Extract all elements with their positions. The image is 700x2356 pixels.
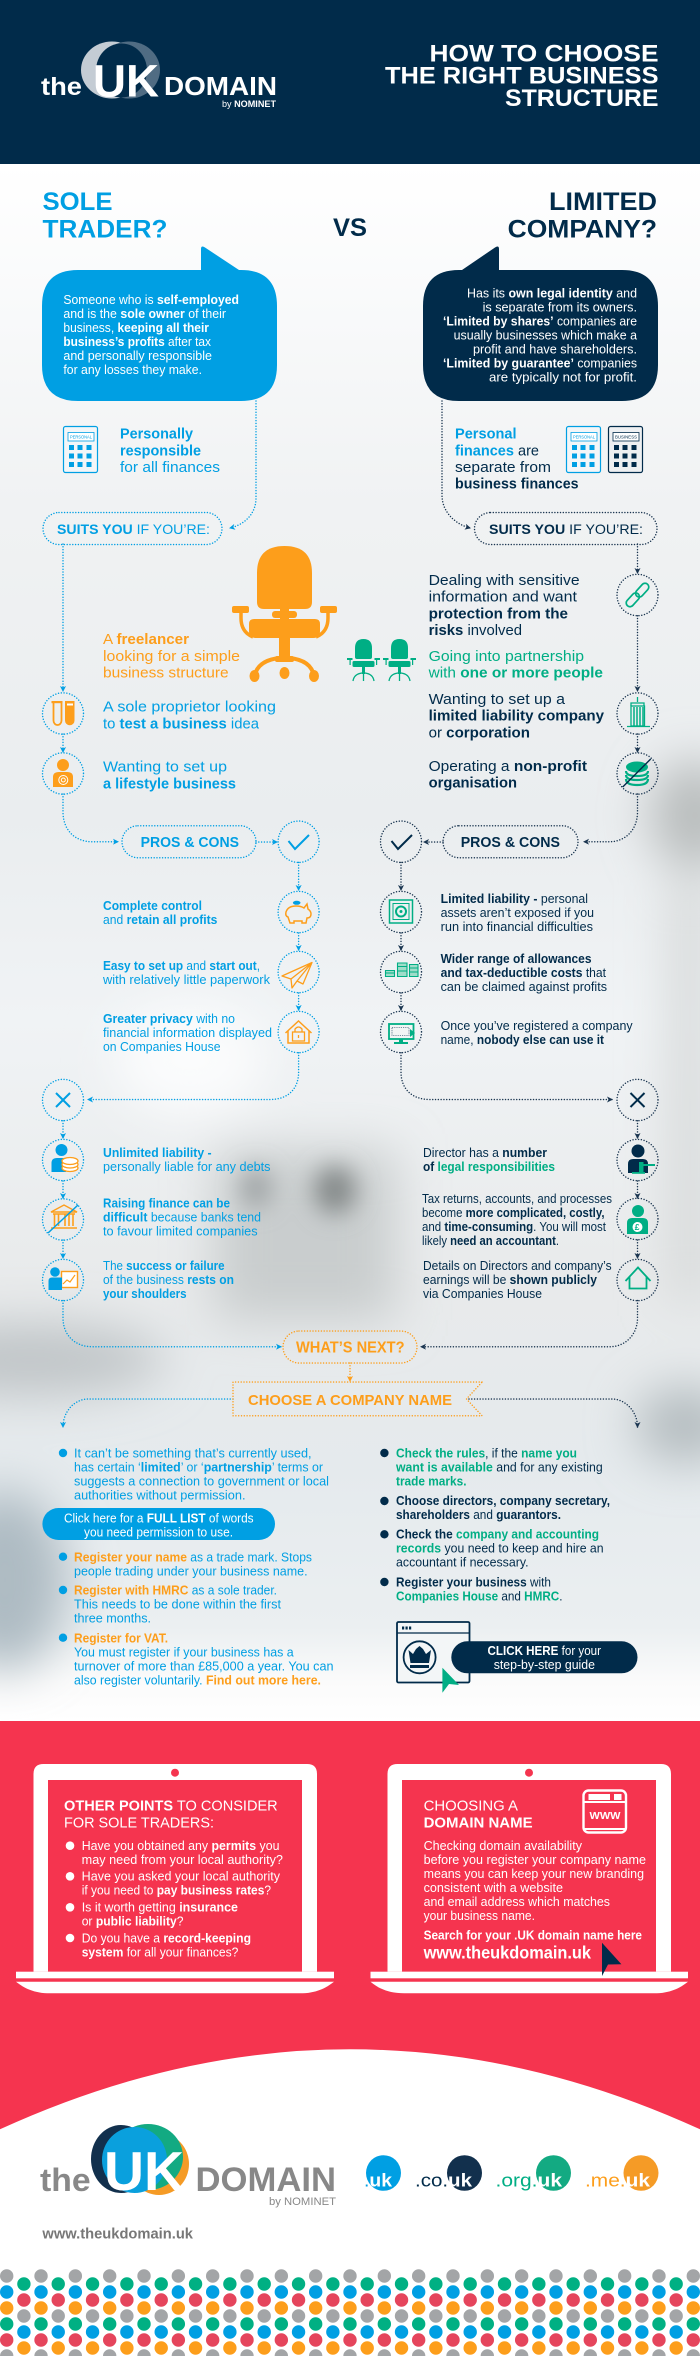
decorative dot pattern xyxy=(7,2276,700,2356)
speech bubble: sole trader: business’s profits after tax xyxy=(63,335,212,349)
list: left registration steps: Register for VAT. xyxy=(74,1631,168,1645)
speech bubble: limited company: ‘Limited by guarantee’ companies xyxy=(443,356,637,370)
icon: monitor xyxy=(380,1011,422,1053)
banner: choose a company name: CHOOSE A COMPANY NAME xyxy=(248,1392,452,1409)
text: success or failure: your shoulders xyxy=(103,1287,187,1301)
logo: the UK domain: UK xyxy=(93,56,160,106)
text: non-profit: organisation xyxy=(429,776,517,792)
logo: the UK domain footer xyxy=(40,2124,336,2208)
text: limited liability company xyxy=(429,692,604,741)
icon: navy cross xyxy=(617,1079,658,1121)
text: success or failure: of the business rests on xyxy=(103,1273,234,1287)
text: non-profit: Operating a non-profit xyxy=(429,759,587,775)
speech bubble: sole trader: and personally responsible xyxy=(63,349,212,363)
icon: house with padlock xyxy=(278,1011,319,1053)
icon: coins crossed out xyxy=(617,753,658,794)
icon: personal finances card: PERSONAL xyxy=(70,434,93,439)
pill: what's next: WHAT’S NEXT? xyxy=(296,1340,404,1357)
list: left registration steps: people trading under your business name. xyxy=(74,1564,308,1578)
text: sensitive information: Dealing with sensitive xyxy=(429,573,580,589)
heading: limited company: LIMITED xyxy=(549,188,657,216)
logo: the UK domain footer: by NOMINET xyxy=(269,2196,336,2208)
panel: laptop choosing a domain name: CHOOSING A xyxy=(424,1799,518,1815)
text: test a business xyxy=(103,700,276,733)
icon: person with target xyxy=(42,753,84,794)
icon: person with coins xyxy=(42,1139,84,1181)
text: limited liability: Limited liability - personal xyxy=(441,892,588,906)
panel: laptop choosing a domain name: Search for your .UK domain name here xyxy=(424,1928,642,1942)
icon: personal card, right: PERSONAL xyxy=(573,434,596,439)
text: partnership: Going into partnership xyxy=(429,649,584,665)
icon: small green chair two xyxy=(383,639,416,681)
list: right company steps: records you need to keep and hire an xyxy=(396,1542,604,1556)
icon: business card, right xyxy=(608,426,642,472)
text: lifestyle business: Wanting to set up xyxy=(103,760,227,776)
heading: sole trader xyxy=(42,188,168,243)
text: raising finance: difficult because banks tend xyxy=(103,1211,261,1225)
title xyxy=(385,41,658,112)
pill: pros and cons, limited company xyxy=(443,826,578,858)
text: unlimited liability: personally liable for any debts xyxy=(103,1160,270,1174)
text: tax returns: Tax returns, accounts, and processes xyxy=(422,1192,612,1206)
list: left registration steps: This needs to be done within the first xyxy=(74,1598,282,1612)
text: limited liability company: Wanting to set up a xyxy=(429,692,566,708)
text: lifestyle business xyxy=(103,760,236,792)
badge: .me.uk xyxy=(585,2155,658,2191)
title: STRUCTURE xyxy=(505,85,658,112)
pill: suits you, sole trader: SUITS YOU IF YOU’RE: xyxy=(57,521,210,537)
icon: director with gavel xyxy=(617,1139,658,1181)
text: greater privacy xyxy=(103,1012,272,1054)
blurred office background xyxy=(0,344,700,1700)
text: greater privacy: on Companies House xyxy=(103,1040,221,1054)
logo: the UK domain xyxy=(41,42,277,110)
list: left registration steps xyxy=(59,1550,334,1687)
list: left registration steps: Register with HMRC as a sole trader. xyxy=(74,1584,277,1598)
list: left registration steps: also register voluntarily. Find out more here. xyxy=(74,1673,321,1687)
connectors: limited company flow xyxy=(401,401,638,1427)
button: click here xyxy=(451,1641,638,1673)
heading: limited company xyxy=(508,188,657,243)
text: allowances: can be claimed against profits xyxy=(441,980,607,994)
pill: pros and cons, sole trader xyxy=(122,826,256,858)
list: right company steps xyxy=(380,1446,610,1603)
text: easy to set up: with relatively little paperwork xyxy=(102,973,271,987)
badge: .uk xyxy=(364,2155,401,2191)
badge: .org.uk xyxy=(496,2155,571,2191)
text: legal responsibilities: Director has a number xyxy=(423,1146,547,1160)
text: tax returns: and time-consuming. You will most xyxy=(422,1220,606,1234)
text: tax returns: become more complicated, costly, xyxy=(422,1206,604,1220)
icon: building xyxy=(617,693,658,734)
text: test a business: to test a business idea xyxy=(103,717,260,733)
button: click here: step-by-step guide xyxy=(494,1658,595,1672)
panel: laptop other points: if you need to pay business rates? xyxy=(82,1884,271,1898)
list: left naming rules: authorities without permission. xyxy=(74,1488,246,1502)
logo: the UK domain footer: DOMAIN xyxy=(196,2161,336,2199)
panel: laptop other points: or public liability? xyxy=(82,1915,184,1929)
text: easy to set up xyxy=(102,959,271,987)
heading: sole trader: SOLE xyxy=(42,188,112,216)
badge: .me.uk: .me. uk xyxy=(585,2171,651,2191)
list: left registration steps: three months. xyxy=(74,1612,151,1626)
panel: laptop choosing a domain name: before you register your company name xyxy=(424,1853,646,1867)
icon: www browser window: WWW xyxy=(590,1810,621,1822)
list: right company steps: accountant if necessary. xyxy=(396,1556,529,1570)
icon: personal card, right xyxy=(566,426,600,472)
list: left naming rules: has certain ‘limited’ or ‘partnership’ terms or xyxy=(74,1460,323,1474)
pill: pros and cons, sole trader: PROS & CONS xyxy=(141,835,239,851)
icon: safe xyxy=(380,891,422,933)
text: allowances xyxy=(441,952,607,994)
panel: laptop choosing a domain name: www.theukdomain.uk xyxy=(423,1942,591,1962)
icon: presenter with chart xyxy=(42,1259,84,1301)
list: right company steps: Choose directors, company secretary, xyxy=(396,1494,610,1508)
text: unlimited liability xyxy=(103,1146,270,1174)
pill: suits you, limited company: SUITS YOU IF YOU’RE: xyxy=(489,521,643,537)
icon: blue tick xyxy=(278,821,319,862)
pill: suits you, limited company xyxy=(474,512,657,544)
text: personally responsible: responsible xyxy=(120,443,201,459)
text: limited liability: run into financial difficulties xyxy=(441,920,593,934)
footer url: www.theukdomain.uk xyxy=(41,2226,194,2242)
button: full list: Click here for a FULL LIST of words xyxy=(64,1511,254,1525)
panel: laptop other points: Have you asked your local authority xyxy=(82,1870,281,1884)
button: click here: CLICK HERE for your xyxy=(488,1644,601,1658)
list: left registration steps: Register your name as a trade mark. Stops xyxy=(74,1550,312,1564)
list: right company steps: shareholders and guarantors. xyxy=(396,1508,561,1522)
button: full list xyxy=(42,1508,275,1540)
pill: suits you, sole trader xyxy=(43,512,222,544)
icon: business card, right: BUSINESS xyxy=(615,434,637,439)
text: details public: via Companies House xyxy=(423,1287,542,1301)
text: personally responsible xyxy=(120,426,220,476)
icon: www browser window xyxy=(584,1790,626,1832)
text: test a business: A sole proprietor looking xyxy=(103,700,276,716)
panel: laptop choosing a domain name: and email address which matches xyxy=(424,1895,610,1909)
text: limited liability company: limited liability company xyxy=(429,709,604,725)
logo: the UK domain footer: UK xyxy=(104,2140,184,2202)
text: personal finances separate: business finances xyxy=(455,476,579,492)
text: raising finance: to favour limited companies xyxy=(103,1225,258,1239)
panel: laptop choosing a domain name: means you can keep your new branding xyxy=(424,1867,644,1881)
list: left naming rules: suggests a connection to government or local xyxy=(74,1474,329,1488)
icon: person with pound sign: £ xyxy=(635,1222,640,1232)
speech bubble: sole trader xyxy=(42,247,277,401)
text: freelancer xyxy=(103,632,240,682)
heading: vs: VS xyxy=(333,214,367,242)
list: right company steps: trade marks. xyxy=(396,1474,466,1488)
icon: browser with crown xyxy=(397,1622,470,1682)
text: freelancer: looking for a simple xyxy=(103,649,240,665)
badge: .org.uk: .org. uk xyxy=(496,2171,563,2191)
speech bubble: limited company: is separate from its owners. xyxy=(483,300,637,314)
text: success or failure: The success or failure xyxy=(103,1259,225,1273)
icon: navy cursor xyxy=(602,1943,621,1976)
icon: bank crossed out xyxy=(42,1199,84,1240)
list: left registration steps: You must register if your business has a xyxy=(74,1645,294,1659)
logo: the UK domain: by NOMINET xyxy=(222,99,276,110)
icon: piggy bank xyxy=(278,891,319,933)
text: partnership xyxy=(428,649,603,682)
text: personal finances separate: finances are xyxy=(455,443,539,459)
logo: the UK domain footer: the xyxy=(40,2162,91,2198)
badge: .co.uk xyxy=(415,2155,482,2191)
logo: the UK domain: the xyxy=(41,73,82,101)
button: full list: you need permission to use. xyxy=(84,1525,233,1539)
logo: the UK domain: DOMAIN xyxy=(164,71,277,101)
connectors: sole trader flow xyxy=(63,401,299,1427)
speech bubble: sole trader: Someone who is self-employed xyxy=(63,293,239,307)
panel: laptop choosing a domain name: your business name. xyxy=(424,1909,535,1923)
title: THE RIGHT BUSINESS xyxy=(385,63,658,90)
icon: personal finances card xyxy=(64,426,98,472)
text: freelancer: A freelancer xyxy=(103,632,189,648)
text: complete control: Complete control xyxy=(103,899,202,913)
text: company name protected: Once you’ve registered a company xyxy=(441,1019,633,1033)
panel: laptop other points: OTHER POINTS TO CONSIDER xyxy=(64,1799,278,1815)
icon: test tubes xyxy=(42,693,84,734)
title: HOW TO CHOOSE xyxy=(430,41,658,68)
panel: laptop other points: FOR SOLE TRADERS: xyxy=(64,1815,214,1831)
pill: what's next xyxy=(283,1331,417,1363)
icon: small green chair one xyxy=(347,639,380,681)
speech bubble: limited company: usually businesses which make a xyxy=(454,328,637,342)
banner: choose a company name xyxy=(233,1382,482,1416)
list: left naming rules: It can’t be something that’s currently used, xyxy=(74,1446,312,1460)
text: success or failure xyxy=(103,1259,234,1301)
panel: laptop choosing a domain name: Checking domain availability xyxy=(424,1839,583,1853)
panel: laptop choosing a domain name: DOMAIN NAME xyxy=(424,1815,533,1831)
icon: stacks of money xyxy=(380,951,422,993)
text: greater privacy: Greater privacy with no xyxy=(103,1012,235,1026)
panel: laptop choosing a domain name xyxy=(370,1764,688,1993)
text: allowances: and tax-deductible costs that xyxy=(441,966,607,980)
text: personal finances separate xyxy=(455,426,579,492)
speech bubble: sole trader: and is the sole owner of their xyxy=(63,307,226,321)
list: right company steps: Check the company and accounting xyxy=(396,1528,599,1542)
text: sensitive information: risks involved xyxy=(429,623,522,639)
text: tax returns: likely need an accountant. xyxy=(422,1234,559,1248)
text: personally responsible: for all finances xyxy=(120,460,220,476)
speech bubble: limited company xyxy=(423,247,658,401)
icon: chain link xyxy=(617,574,658,616)
list: right company steps: want is available and for any existing xyxy=(395,1460,603,1474)
list: left naming rules xyxy=(59,1446,329,1502)
text: greater privacy: financial information displayed xyxy=(103,1026,272,1040)
text: sensitive information xyxy=(429,573,580,639)
badge: .co.uk: .co.uk xyxy=(415,2171,473,2191)
text: company name protected: name, nobody else can use it xyxy=(441,1033,605,1047)
icon: blue cross xyxy=(42,1079,84,1121)
icon: green cursor xyxy=(442,1668,459,1693)
header band xyxy=(0,0,700,164)
speech bubble: limited company: ‘Limited by shares’ companies are xyxy=(443,314,637,328)
text: lifestyle business: a lifestyle business xyxy=(103,776,236,792)
text: complete control: and retain all profits xyxy=(103,913,217,927)
text: details public: earnings will be shown publicly xyxy=(423,1273,597,1287)
speech bubble: sole trader: business, keeping all their xyxy=(63,321,209,335)
text: legal responsibilities xyxy=(423,1146,555,1174)
speech bubble: limited company: Has its own legal identity and xyxy=(467,286,637,300)
panel: laptop choosing a domain name: consistent with a website xyxy=(424,1881,563,1895)
icon: person with pound sign xyxy=(617,1198,658,1240)
text: company name protected xyxy=(441,1019,633,1047)
text: limited liability: assets aren’t exposed if you xyxy=(441,906,594,920)
text: partnership: with one or more people xyxy=(428,666,603,682)
list: right company steps: Companies House and HMRC. xyxy=(396,1589,562,1603)
heading: sole trader: TRADER? xyxy=(42,215,168,243)
text: personal finances separate: Personal xyxy=(455,426,516,442)
text: sensitive information: protection from the xyxy=(429,606,568,622)
red section with curved bottom xyxy=(0,1721,700,2129)
speech bubble: limited company: profit and have shareholders. xyxy=(473,342,637,356)
panel: laptop other points: Is it worth getting insurance xyxy=(82,1901,238,1915)
icon: navy tick xyxy=(380,821,422,862)
text: allowances: Wider range of allowances xyxy=(441,952,592,966)
icon: house outline xyxy=(617,1259,658,1301)
list: right company steps: Register your business with xyxy=(396,1575,551,1589)
text: details public xyxy=(423,1259,612,1301)
text: limited liability xyxy=(441,892,594,934)
text: non-profit xyxy=(429,759,587,792)
text: sensitive information: information and want xyxy=(429,590,577,606)
text: legal responsibilities: of legal responsibilities xyxy=(423,1160,555,1174)
text: raising finance xyxy=(103,1197,261,1239)
text: complete control xyxy=(103,899,217,927)
list: right company steps: Check the rules, if the name you xyxy=(396,1446,577,1460)
panel: laptop other points xyxy=(16,1764,334,1993)
pill: pros and cons, limited company: PROS & CONS xyxy=(461,835,560,851)
arrow: next to choose xyxy=(349,1363,351,1381)
panel: laptop other points: Do you have a record-keeping xyxy=(82,1931,251,1945)
text: unlimited liability: Unlimited liability - xyxy=(103,1146,212,1160)
badge: .uk: .uk xyxy=(364,2171,393,2191)
text: personally responsible: Personally xyxy=(120,426,193,442)
text: raising finance: Raising finance can be xyxy=(103,1197,230,1211)
speech bubble: sole trader: for any losses they make. xyxy=(63,363,202,377)
panel: laptop other points: may need from your local authority? xyxy=(82,1853,283,1867)
text: easy to set up: Easy to set up and start out, xyxy=(103,959,260,973)
icon: large orange office chair xyxy=(232,546,337,682)
panel: laptop other points: system for all your finances? xyxy=(82,1945,238,1959)
text: tax returns xyxy=(422,1192,612,1248)
icon: paper plane xyxy=(278,951,319,993)
speech bubble: limited company: are typically not for profit. xyxy=(489,370,637,384)
text: personal finances separate: separate from xyxy=(455,460,551,476)
text: details public: Details on Directors and company’s xyxy=(423,1259,612,1273)
text: limited liability company: or corporation xyxy=(429,725,530,741)
panel: laptop other points: Have you obtained any permits you xyxy=(82,1839,280,1853)
list: left registration steps: turnover of more than £85,000 a year. You can xyxy=(74,1659,334,1673)
text: freelancer: business structure xyxy=(103,666,229,682)
heading: limited company: COMPANY? xyxy=(508,215,657,243)
